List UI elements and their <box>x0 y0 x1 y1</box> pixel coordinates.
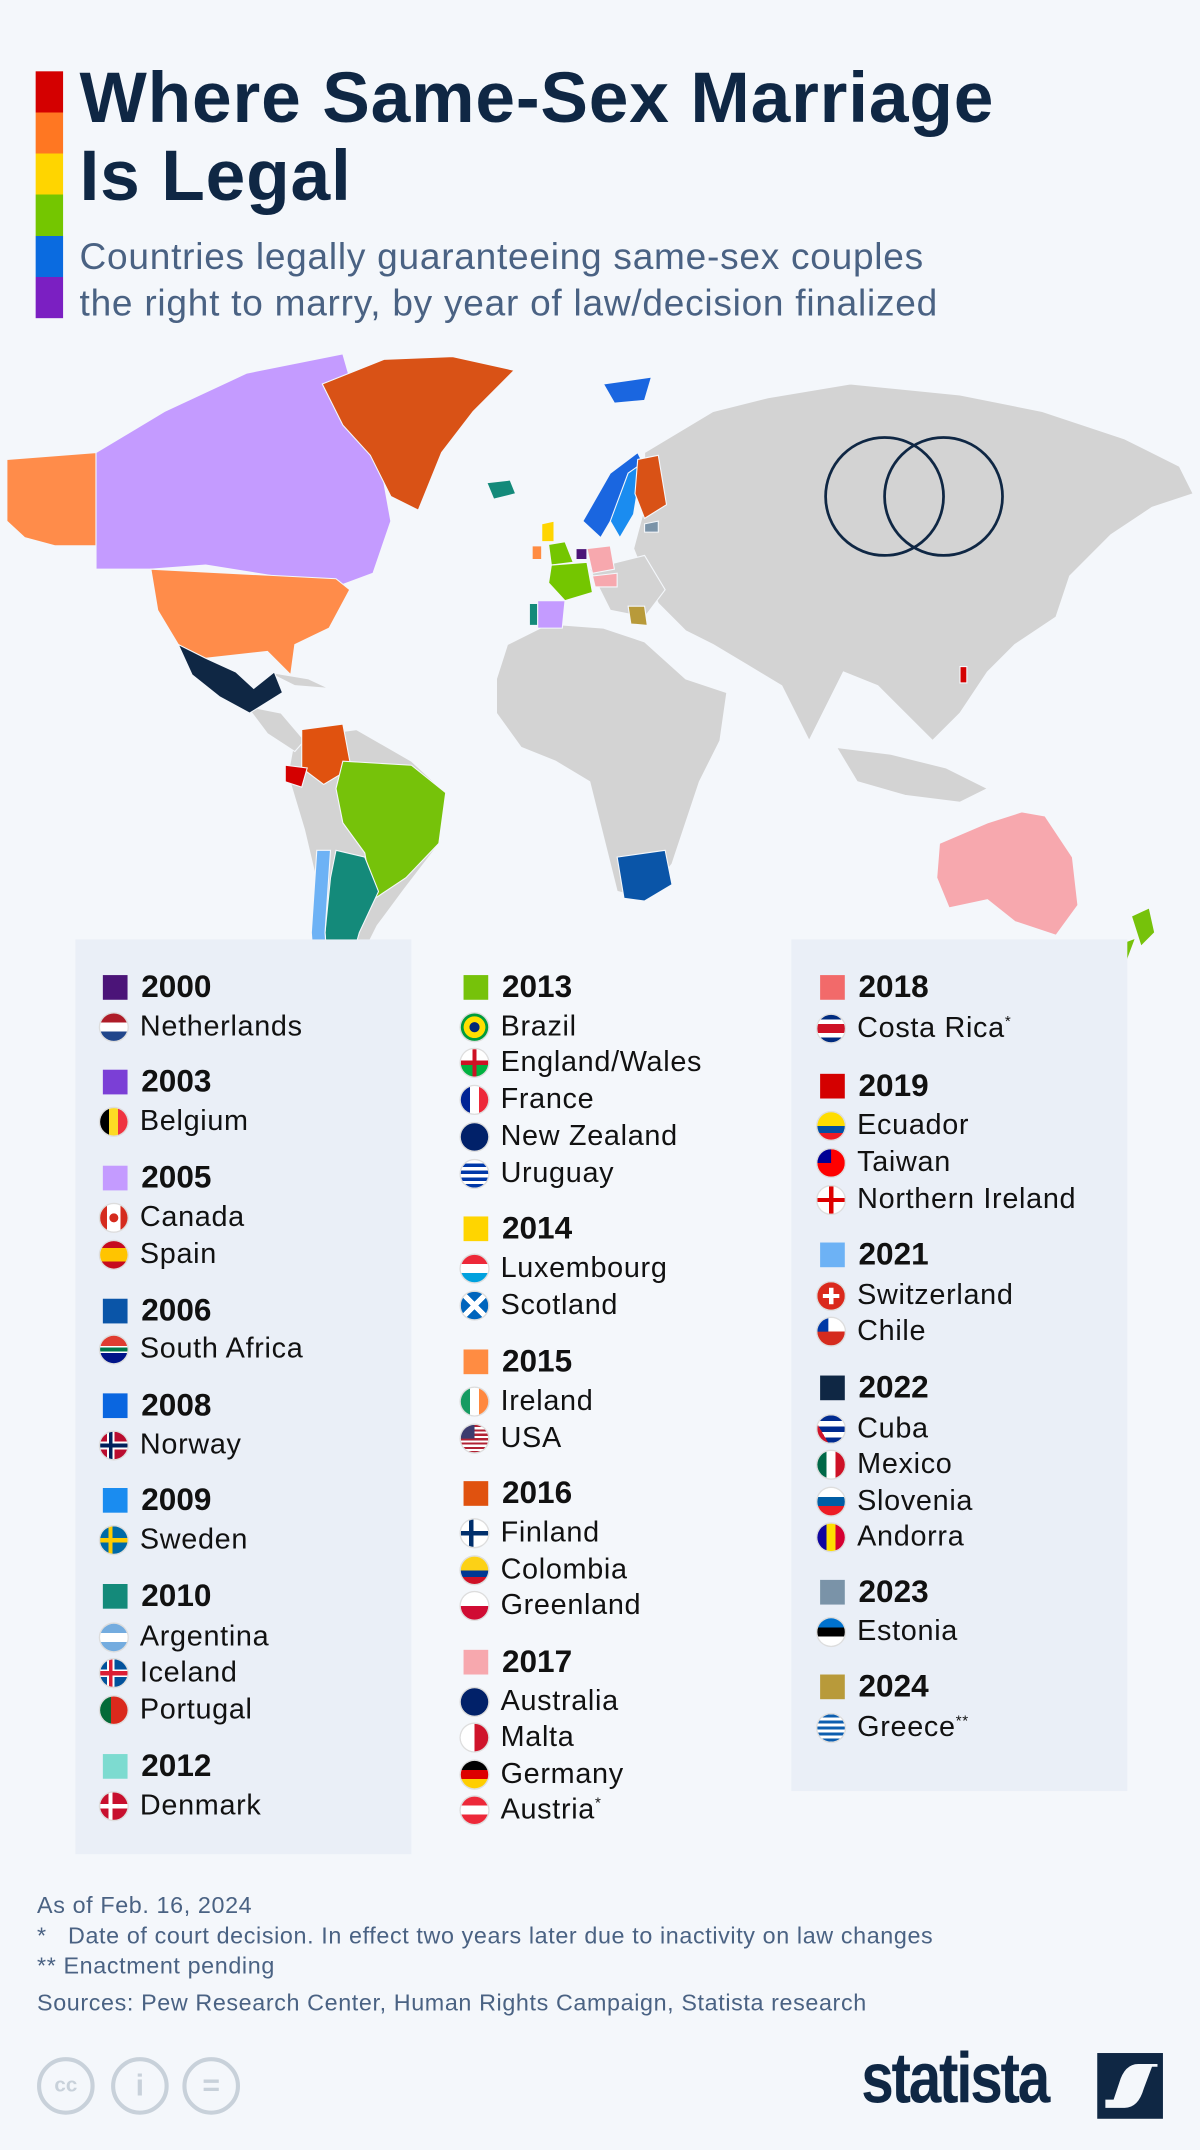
panel: column 3 <box>791 939 1127 1791</box>
year 2006: 2006 <box>141 1292 211 1328</box>
title: Is Legal <box>80 137 352 217</box>
country Ireland: Ireland <box>501 1385 593 1417</box>
year 2023 <box>820 1572 929 1610</box>
country Denmark: Denmark <box>140 1790 262 1821</box>
logo: statista: statista <box>861 2039 1048 2119</box>
year 2017: 2017 <box>502 1643 572 1679</box>
year 2017 <box>464 1642 572 1680</box>
year 2009: 2009 <box>141 1481 211 1517</box>
country Andorra: Andorra <box>857 1521 964 1552</box>
year 2012: 2012 <box>141 1747 211 1783</box>
gray landmasses <box>247 384 1193 987</box>
country South Africa: South Africa <box>140 1333 303 1365</box>
country Mexico <box>817 1448 953 1481</box>
country Iceland: Iceland <box>140 1657 238 1688</box>
year 2012 <box>102 1747 211 1783</box>
country Spain <box>98 1238 217 1270</box>
country Brazil: Brazil <box>501 1011 577 1042</box>
year 2013 <box>464 968 572 1004</box>
country Spain: Spain <box>140 1238 217 1270</box>
year 2022: 2022 <box>859 1369 929 1404</box>
country Ireland <box>460 1385 593 1417</box>
icons: creative commons: i <box>136 2068 144 2102</box>
logo: statista <box>861 2043 1166 2123</box>
year 2022 <box>820 1367 929 1406</box>
country Germany: Germany <box>501 1758 624 1790</box>
sources: Sources: Pew Research Center, Human Rights Campaign, Statista research <box>37 1990 867 2016</box>
year 2021 <box>820 1234 929 1273</box>
country Malta: Malta <box>501 1721 574 1753</box>
year 2000: 2000 <box>141 968 211 1004</box>
country France <box>460 1083 594 1115</box>
country Norway: Norway <box>140 1429 242 1461</box>
year 2009 <box>102 1481 211 1517</box>
rainbow bar <box>36 71 63 318</box>
year 2014: 2014 <box>502 1210 572 1245</box>
country Greece: Greece** <box>857 1712 969 1743</box>
title <box>80 59 994 217</box>
date note: As of Feb. 16, 2024 <box>37 1893 252 1919</box>
country Belgium: Belgium <box>140 1105 249 1137</box>
world map <box>7 354 1192 959</box>
footnotes <box>37 1893 1024 2023</box>
year 2023: 2023 <box>859 1573 929 1609</box>
country Uruguay: Uruguay <box>501 1157 614 1189</box>
legend column 1 <box>98 968 303 1822</box>
year 2019: 2019 <box>859 1067 929 1103</box>
country Canada: Canada <box>140 1201 245 1233</box>
subtitle: the right to marry, by year of law/decision finalized <box>80 283 938 324</box>
country USA: USA <box>501 1422 562 1454</box>
year 2008 <box>102 1387 211 1422</box>
icons: creative commons <box>37 2057 243 2115</box>
colored countries <box>7 453 96 546</box>
year 2019 <box>820 1066 929 1104</box>
country Taiwan <box>817 1147 951 1179</box>
country Ecuador: Ecuador <box>857 1109 969 1141</box>
country Estonia <box>817 1616 958 1648</box>
country Costa Rica: Costa Rica* <box>857 1012 1011 1044</box>
country Netherlands: Netherlands <box>140 1011 303 1042</box>
country Scotland: Scotland <box>501 1289 618 1321</box>
country Northern Ireland: Northern Ireland <box>857 1184 1076 1215</box>
country Greenland: Greenland <box>501 1589 641 1621</box>
country New Zealand: New Zealand <box>501 1120 678 1152</box>
year 2024: 2024 <box>859 1668 929 1703</box>
subtitle <box>80 236 938 324</box>
year 2015 <box>464 1343 572 1378</box>
title: Where Same-Sex Marriage <box>80 59 994 139</box>
country Austria <box>461 1794 602 1827</box>
country Colombia: Colombia <box>501 1554 628 1585</box>
country Cuba: Cuba <box>857 1413 929 1444</box>
year 2015: 2015 <box>502 1343 572 1378</box>
year 2024 <box>820 1666 929 1705</box>
year 2005 <box>102 1159 211 1195</box>
year 2016 <box>464 1474 572 1510</box>
year 2003 <box>102 1063 211 1099</box>
country Slovenia: Slovenia <box>857 1485 973 1517</box>
year 2005: 2005 <box>141 1159 211 1195</box>
country Malta <box>461 1721 574 1754</box>
legend column 3 <box>795 960 1125 1755</box>
year 2010 <box>102 1577 211 1613</box>
panel: column 1 <box>75 939 411 1854</box>
country Australia: Australia <box>501 1685 619 1717</box>
country Portugal: Portugal <box>140 1694 253 1725</box>
year 2018: 2018 <box>859 968 929 1004</box>
country Brazil <box>460 1011 577 1042</box>
year 2008: 2008 <box>141 1387 211 1422</box>
country Cuba <box>817 1413 929 1445</box>
country Taiwan: Taiwan <box>857 1147 951 1178</box>
country Mexico: Mexico <box>857 1448 953 1480</box>
country Sweden: Sweden <box>140 1524 248 1555</box>
year 2013: 2013 <box>502 968 572 1004</box>
icons: creative commons: cc <box>54 2074 77 2097</box>
legend column 2 <box>460 968 702 1826</box>
footnote single asterisk: * Date of court decision. In effect two years later due to inactivity on law changes <box>37 1923 933 1949</box>
country USA <box>460 1422 562 1454</box>
country Switzerland: Switzerland <box>857 1280 1014 1311</box>
footnote double asterisk: ** Enactment pending <box>37 1953 275 1979</box>
country Austria: Austria* <box>501 1794 602 1825</box>
country Andorra <box>817 1521 964 1554</box>
year 2003: 2003 <box>141 1063 211 1099</box>
country Chile <box>817 1315 926 1348</box>
country England/Wales: England/Wales <box>501 1046 702 1078</box>
subtitle: Countries legally guaranteeing same-sex couples <box>80 236 924 277</box>
country Iceland <box>98 1657 238 1688</box>
year 2021: 2021 <box>859 1236 929 1271</box>
country Finland: Finland <box>501 1517 600 1548</box>
year 2000 <box>102 968 211 1004</box>
year 2016: 2016 <box>502 1474 572 1510</box>
country Estonia: Estonia <box>857 1616 958 1647</box>
country France: France <box>501 1083 594 1115</box>
icons: creative commons: = <box>202 2068 220 2102</box>
country Argentina: Argentina <box>140 1621 269 1653</box>
year 2006 <box>102 1292 211 1328</box>
year 2010: 2010 <box>141 1577 211 1613</box>
icon: wedding rings <box>826 437 1003 555</box>
country Luxembourg: Luxembourg <box>501 1252 668 1284</box>
year 2018 <box>820 967 929 1005</box>
year 2014 <box>464 1210 572 1245</box>
country Chile: Chile <box>857 1315 926 1347</box>
